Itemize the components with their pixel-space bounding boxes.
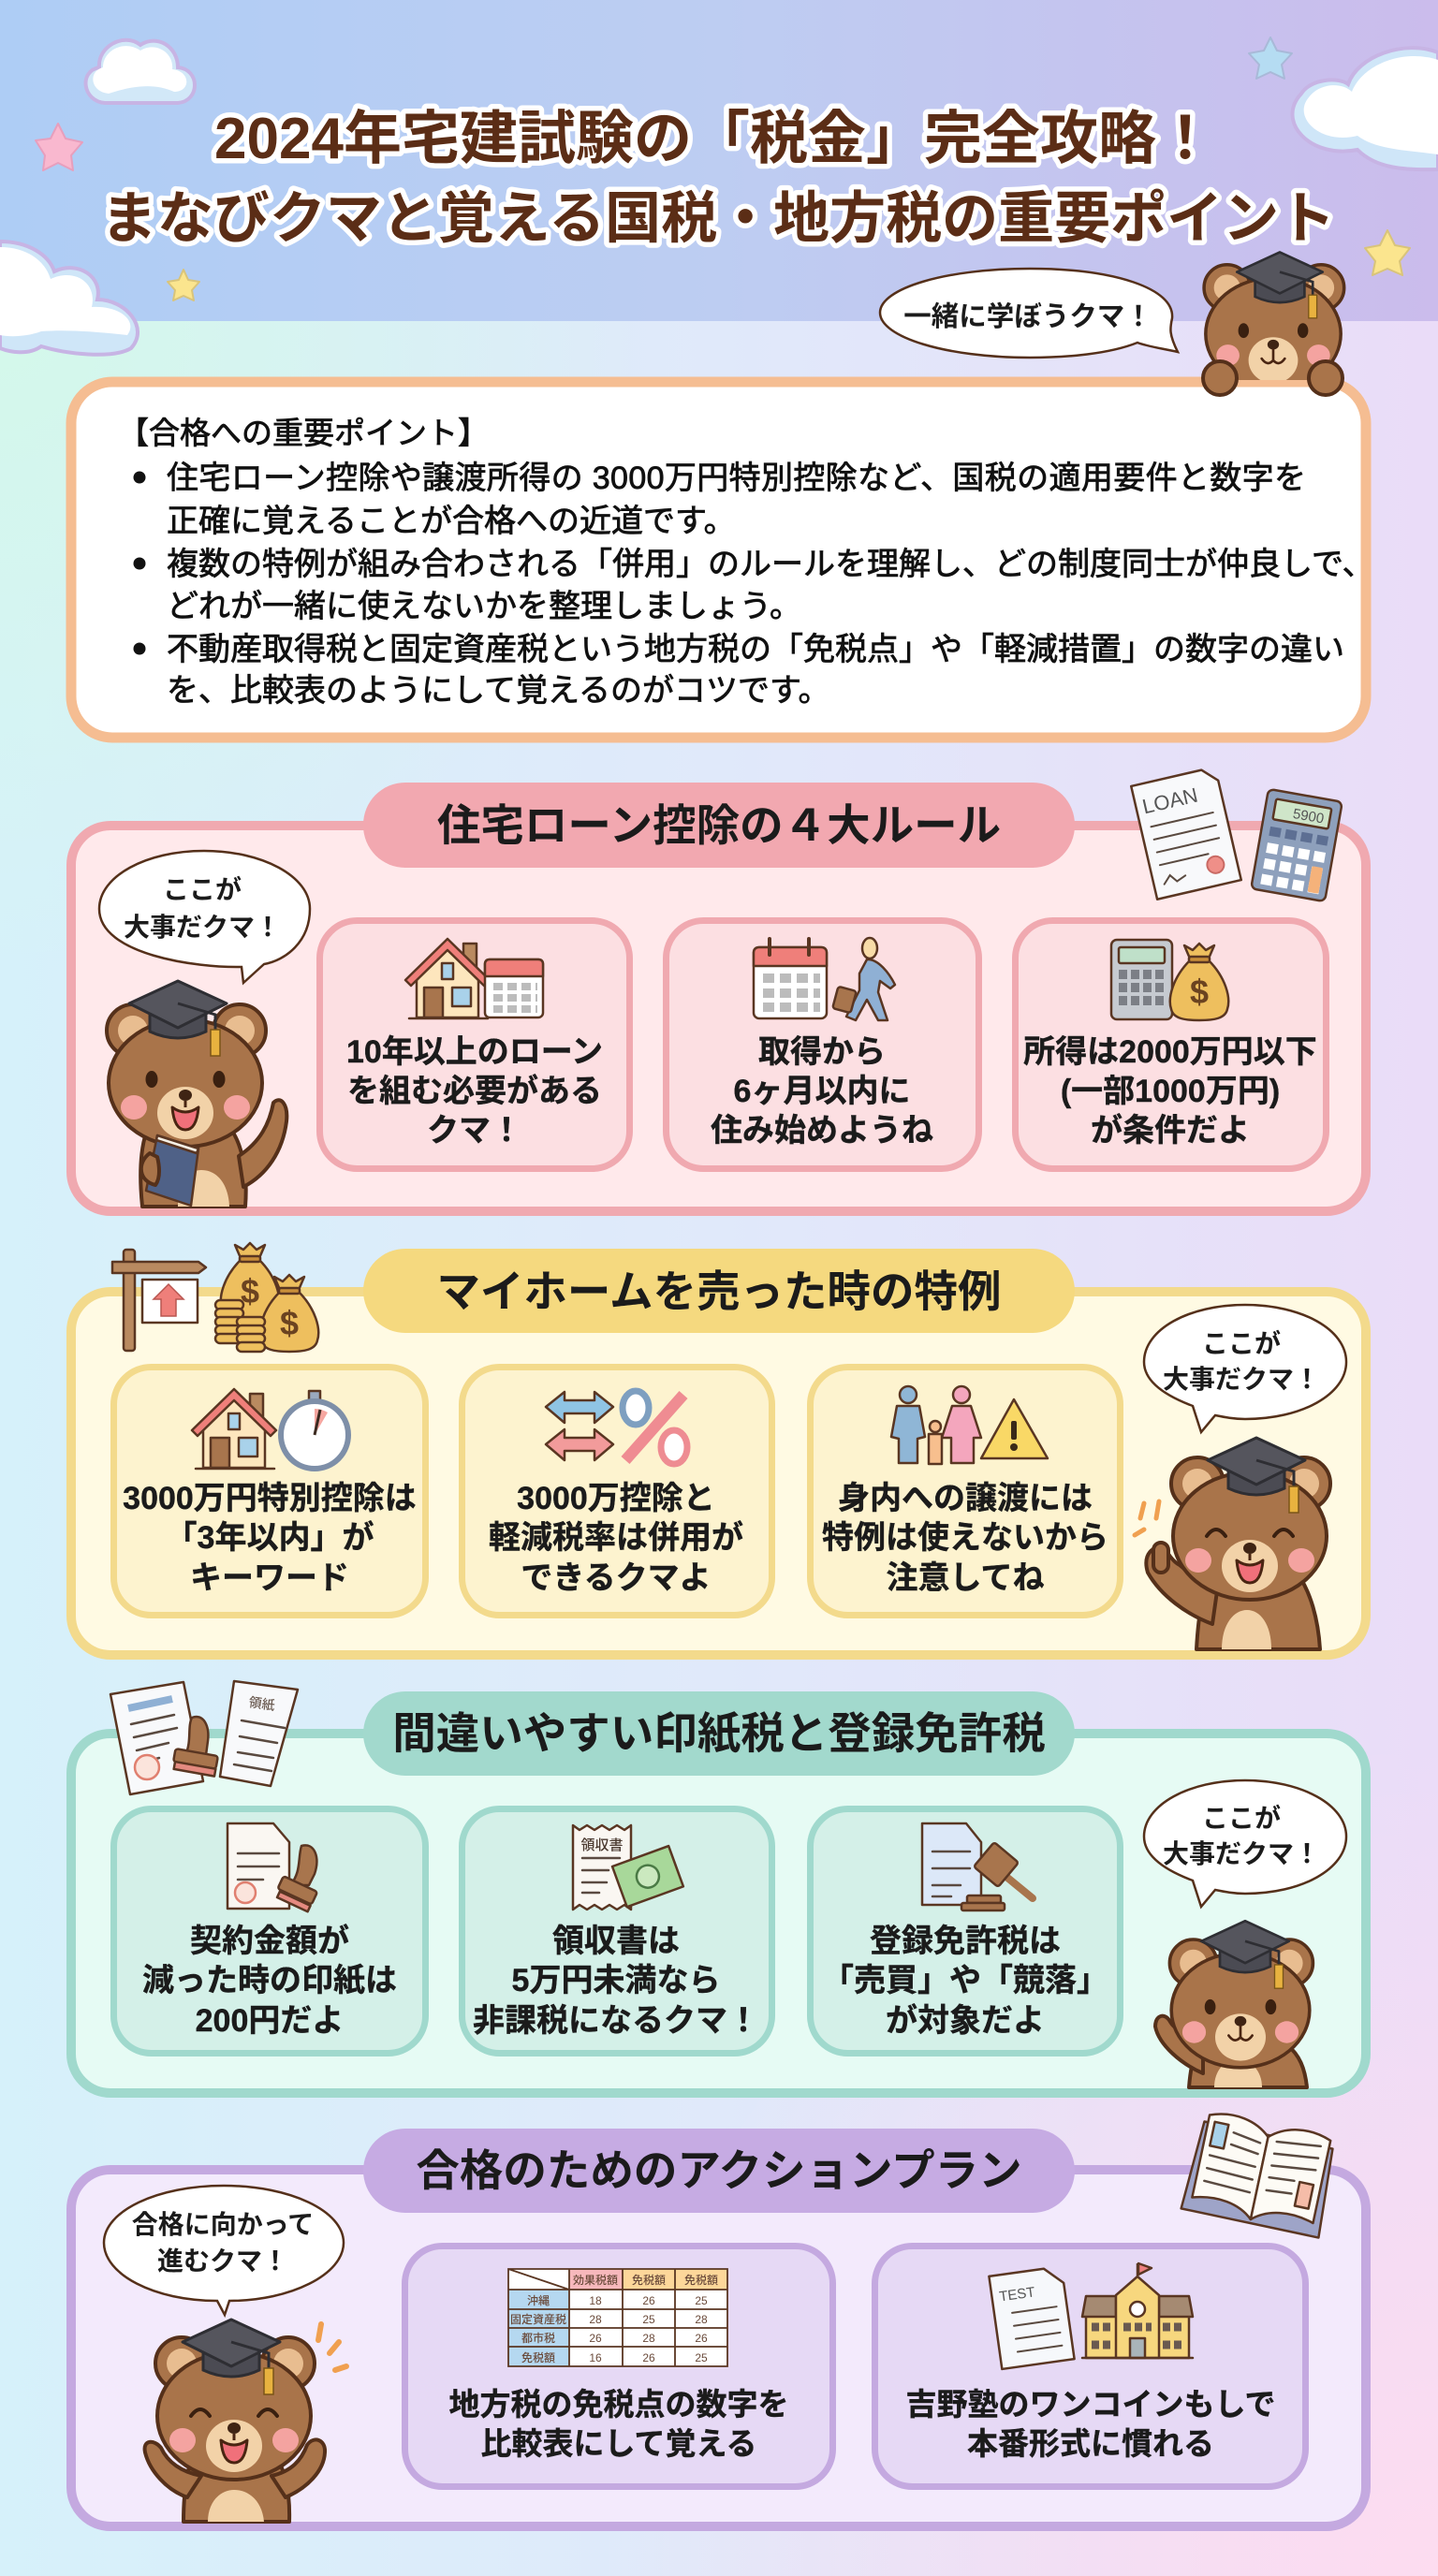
table: exemption comparison: 26 <box>695 2332 708 2345</box>
heading pill <box>363 1691 1075 1776</box>
speech bubble: important <box>99 851 310 983</box>
card: receipt exemption: 非課税になるクマ！ <box>473 2003 759 2039</box>
icon: documents and stamp: 領紙 <box>248 1694 276 1713</box>
table: exemption comparison: 沖縄 <box>527 2294 550 2307</box>
bullet list: どれが一緒に使えないかを整理しましょう。 <box>167 589 801 624</box>
card: mock exam: 吉野塾のワンコインもしで <box>905 2387 1276 2422</box>
card: receipt exemption: 5万円未満なら <box>512 1963 720 1998</box>
heading pill <box>363 2129 1075 2213</box>
card: combining reduced tax rate: 軽減税率は併用が <box>489 1519 743 1556</box>
star: pink <box>36 124 82 170</box>
speech bubble: important: 大事だクマ！ <box>1163 1839 1320 1868</box>
panel: selling my home <box>71 1243 1366 1655</box>
card: contract stamp: 契約金額が <box>190 1923 349 1959</box>
icon: calculator: 5900 <box>1292 806 1325 827</box>
card: 10 year loan: クマ！ <box>427 1113 522 1149</box>
card: contract stamp: 減った時の印紙は <box>142 1963 397 1998</box>
speech bubble: important <box>1144 1780 1346 1907</box>
table: exemption comparison: 26 <box>589 2332 602 2345</box>
character: peeking bear <box>1203 252 1344 395</box>
bullet list: 複数の特例が組み合わされる「併用」のルールを理解し、どの制度同士が仲良しで、 <box>167 547 1374 582</box>
star: blue <box>1249 37 1292 79</box>
character: bear waving <box>1155 1921 1313 2087</box>
card: transfer to relatives: 特例は使えないから <box>822 1520 1108 1556</box>
card: registration tax: 登録免許税は <box>870 1924 1061 1959</box>
card: contract stamp: 200円だよ <box>196 2003 344 2039</box>
bullet list: 住宅ローン控除や譲渡所得の 3000万円特別控除など、国税の適用要件と数字を <box>167 461 1306 496</box>
card: transfer to relatives: 身内への譲渡には <box>838 1481 1093 1516</box>
bullet list: 正確に覚えることが合格への近道です。 <box>167 504 736 539</box>
card: income limit: 所得は2000万円以下 <box>1023 1034 1317 1070</box>
card: 3000 man yen deduction: 3000万円特別控除は <box>123 1481 417 1516</box>
panel: housing loan deduction <box>71 767 1366 1211</box>
icon: test paper: TEST <box>998 2284 1036 2305</box>
panel: stamp and registration tax <box>71 1681 1366 2093</box>
card: 10 year loan: 10年以上のローン <box>346 1034 603 1070</box>
cloud: top right <box>1292 48 1438 169</box>
table: exemption comparison: 16 <box>589 2351 602 2364</box>
icon: loan document: LOAN <box>1140 783 1200 818</box>
card: 3000 man yen deduction: キーワード <box>190 1560 349 1596</box>
title: まなびクマと覚える国税・地方税の重要ポイント <box>101 187 1335 250</box>
icon: for sale sign and money <box>112 1243 318 1352</box>
card: combining reduced tax rate <box>462 1367 771 1616</box>
card: registration tax: が対象だよ <box>886 2002 1045 2039</box>
card: combining reduced tax rate: 3000万控除と <box>517 1481 715 1516</box>
card: 3000 man yen deduction <box>114 1367 425 1616</box>
cloud: top left <box>86 40 195 103</box>
character: bear thumbs up <box>1135 1438 1330 1649</box>
table: exemption comparison: 26 <box>642 2294 655 2307</box>
character: bear with book <box>107 981 286 1207</box>
card: move in within 6 months <box>667 921 979 1168</box>
speech bubble: important: ここが <box>1202 1803 1281 1833</box>
card: receipt exemption: 領収書 <box>580 1837 624 1853</box>
card: move in within 6 months: 住み始めようね <box>711 1113 933 1149</box>
card: mock exam: 本番形式に慣れる <box>967 2426 1214 2461</box>
card: receipt exemption: 領収書は <box>552 1924 680 1959</box>
icon: documents and stamp <box>110 1681 298 1794</box>
panel: key points: 【合格への重要ポイント】 <box>118 416 489 450</box>
table: exemption comparison: 25 <box>642 2313 655 2326</box>
card: 3000 man yen deduction: 「3年以内」が <box>166 1519 374 1556</box>
card: registration tax <box>811 1808 1120 2054</box>
speech bubble: important <box>1144 1305 1346 1432</box>
icon: test paper <box>989 2266 1075 2369</box>
card: income limit <box>1015 921 1326 1168</box>
card: comparison table <box>404 2247 833 2486</box>
card: transfer to relatives <box>811 1367 1120 1616</box>
heading pill: 住宅ローン控除の４大ルール <box>437 801 1001 850</box>
table: exemption comparison: 免税額 <box>632 2273 666 2287</box>
star: yellow right <box>1365 230 1410 275</box>
card: income limit: が条件だよ <box>1091 1112 1250 1149</box>
table: exemption comparison: 25 <box>695 2294 708 2307</box>
heading pill <box>363 783 1075 868</box>
card: move in within 6 months: 取得から <box>758 1034 886 1070</box>
icon: loan document <box>1131 767 1241 900</box>
table: exemption comparison: 28 <box>642 2332 655 2345</box>
card: combining reduced tax rate: できるクマよ <box>521 1560 712 1596</box>
heading pill: マイホームを売った時の特例 <box>436 1267 1002 1316</box>
character: bear arms up <box>145 2320 346 2522</box>
card: receipt exemption <box>462 1808 771 2054</box>
speech bubble: important: 大事だクマ！ <box>1163 1365 1320 1394</box>
speech bubble: greeting: 一緒に学ぼうクマ！ <box>903 301 1152 332</box>
star: yellow small <box>168 270 199 300</box>
card: comparison table: 比較表にして覚える <box>480 2426 757 2461</box>
card: contract stamp <box>114 1808 425 2054</box>
card: income limit: (一部1000万円) <box>1061 1074 1280 1109</box>
table: exemption comparison: 18 <box>589 2294 602 2307</box>
speech bubble: toward passing: 合格に向かって <box>132 2210 314 2239</box>
card: mock exam <box>874 2247 1305 2486</box>
card: move in within 6 months: 6ヶ月以内に <box>734 1074 910 1109</box>
card: transfer to relatives: 注意してね <box>887 1560 1044 1596</box>
panel: key points <box>71 382 1374 738</box>
table: exemption comparison: 効果税額 <box>573 2274 618 2287</box>
cloud: left <box>0 242 138 355</box>
speech bubble: important: ここが <box>1202 1328 1281 1358</box>
card: 10 year loan <box>320 921 629 1168</box>
table: exemption comparison: 28 <box>589 2313 602 2326</box>
bullet list <box>133 461 1374 709</box>
heading pill <box>363 1249 1075 1333</box>
table: exemption comparison: 26 <box>642 2351 655 2364</box>
icon: school building <box>1082 2263 1193 2358</box>
table: exemption comparison: 免税額 <box>684 2273 718 2287</box>
card: registration tax: 「売買」や「競落」 <box>822 1963 1108 1998</box>
speech bubble: toward passing <box>104 2186 344 2315</box>
title: 2024年宅建試験の「税金」完全攻略！ <box>214 107 1214 171</box>
panel: action plan <box>71 2109 1366 2526</box>
heading pill: 合格のためのアクションプラン <box>416 2146 1022 2195</box>
table: exemption comparison: 固定資産税 <box>510 2312 566 2326</box>
title <box>101 107 1335 250</box>
table: exemption comparison: 25 <box>695 2351 708 2364</box>
bullet list: 不動産取得税と固定資産税という地方税の「免税点」や「軽減措置」の数字の違い <box>167 632 1344 667</box>
speech bubble: greeting <box>880 269 1178 358</box>
card: 10 year loan: を組む必要がある <box>347 1073 602 1109</box>
table: exemption comparison: 都市税 <box>521 2331 555 2345</box>
table: exemption comparison: 28 <box>695 2313 708 2326</box>
card: comparison table: 地方税の免税点の数字を <box>449 2387 788 2422</box>
icon: calculator <box>1251 789 1343 901</box>
speech bubble: toward passing: 進むクマ！ <box>157 2247 288 2276</box>
table: exemption comparison: 免税額 <box>521 2350 555 2364</box>
speech bubble: important: ここが <box>163 874 242 904</box>
table: exemption comparison <box>508 2269 727 2366</box>
heading pill: 間違いやすい印紙税と登録免許税 <box>392 1709 1046 1758</box>
icon: open book <box>1181 2109 1340 2238</box>
bullet list: を、比較表のようにして覚えるのがコツです。 <box>167 673 830 709</box>
speech bubble: important: 大事だクマ！ <box>124 913 281 942</box>
